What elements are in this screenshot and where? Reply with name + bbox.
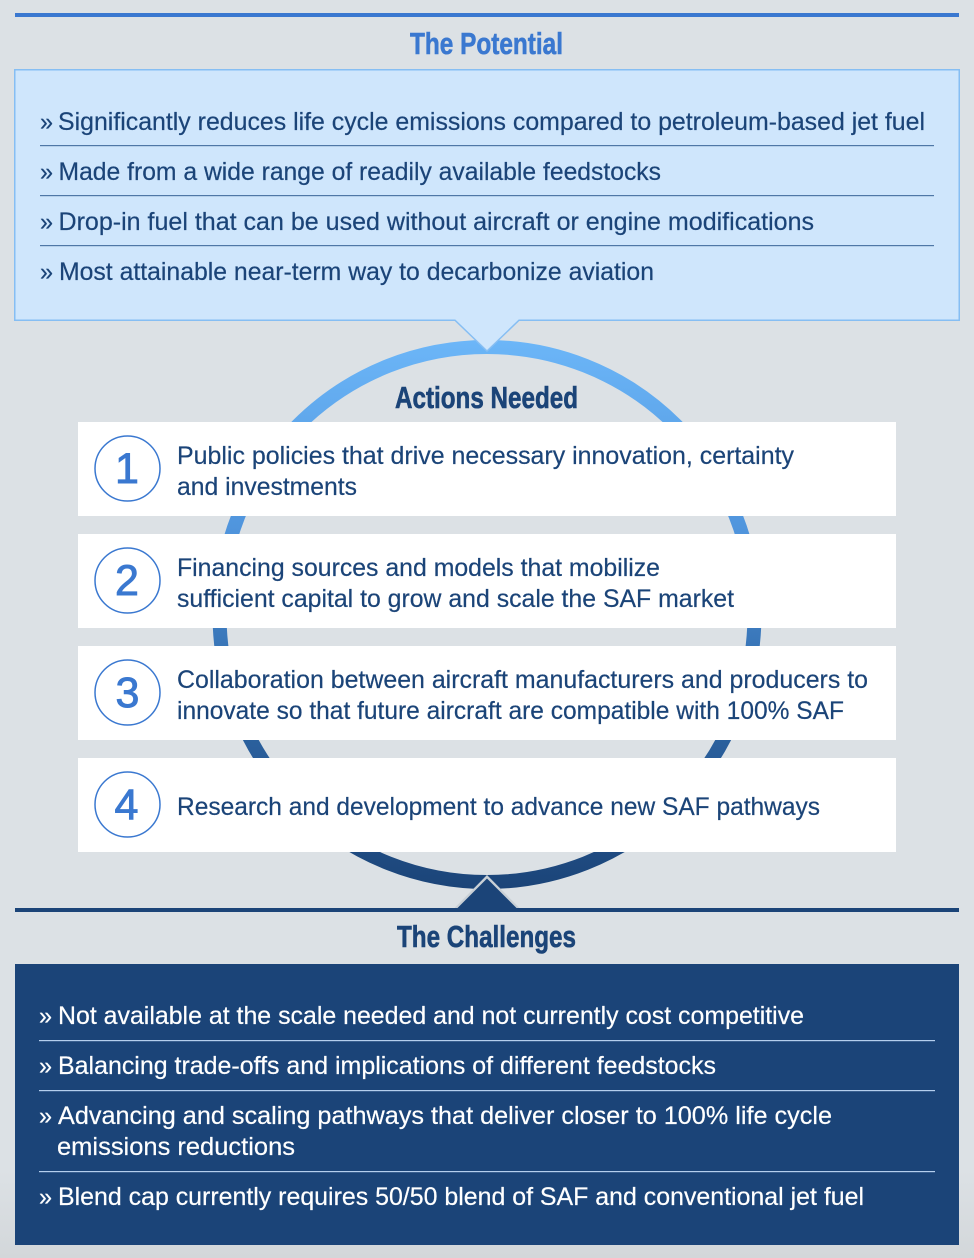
potential item 4: Most attainable near-term way to decarbonize aviation (59, 258, 654, 286)
action card 1: 1 (115, 445, 139, 493)
callout box with pointer (15, 70, 959, 351)
heading: The Challenges: The Challenges (397, 919, 576, 954)
challenge item 3: Advancing and scaling pathways that deliver closer to 100% life cycle (58, 1102, 832, 1130)
ring: actions cycle (220, 347, 754, 882)
potential item 1: » (40, 108, 53, 136)
challenge item 4: » (39, 1183, 52, 1211)
action card 2: 2 (115, 557, 139, 605)
challenge item 2: » (39, 1052, 52, 1080)
action card 4 (78, 758, 896, 852)
action card 1: Public policies that drive necessary innovation, certainty (177, 442, 794, 470)
top rule (15, 13, 959, 17)
challenge item 1: » (39, 1002, 52, 1030)
action card 4: Research and development to advance new SAF pathways (177, 793, 820, 821)
potential item 2: Made from a wide range of readily available feedstocks (58, 158, 661, 186)
challenge item 4: Blend cap currently requires 50/50 blend of SAF and conventional jet fuel (58, 1183, 864, 1211)
potential item 4: » (40, 258, 53, 286)
potential item 3: » (40, 208, 53, 236)
challenge item 3: emissions reductions (57, 1133, 295, 1161)
action card 3: 3 (116, 669, 139, 717)
heading: The Potential: The Potential (410, 26, 563, 61)
potential item 2: » (40, 158, 53, 186)
challenge item 3 (39, 1102, 832, 1161)
action card 3 (78, 646, 896, 740)
action card 1: and investments (177, 473, 357, 501)
panel: the challenges (15, 964, 959, 1245)
action card 1 (78, 422, 896, 516)
heading: Actions Needed: Actions Needed (395, 380, 578, 415)
action card 4: 4 (115, 781, 138, 829)
panel: the potential (15, 70, 959, 351)
potential item 1: Significantly reduces life cycle emissions compared to petroleum-based jet fuel (58, 108, 925, 136)
action card 2: Financing sources and models that mobilize (177, 554, 660, 582)
bottom rule with pointer (15, 875, 959, 912)
action card 2: sufficient capital to grow and scale the SAF market (177, 585, 734, 613)
challenge item 3: » (39, 1102, 52, 1130)
challenge item 1: Not available at the scale needed and not currently cost competitive (58, 1002, 804, 1030)
action card 3: Collaboration between aircraft manufacturers and producers to (177, 666, 868, 694)
action card 2 (78, 534, 896, 628)
potential item 3: Drop-in fuel that can be used without aircraft or engine modifications (58, 208, 814, 236)
challenge item 2: Balancing trade-offs and implications of different feedstocks (58, 1052, 716, 1080)
action card 3: innovate so that future aircraft are compatible with 100% SAF (177, 697, 844, 725)
